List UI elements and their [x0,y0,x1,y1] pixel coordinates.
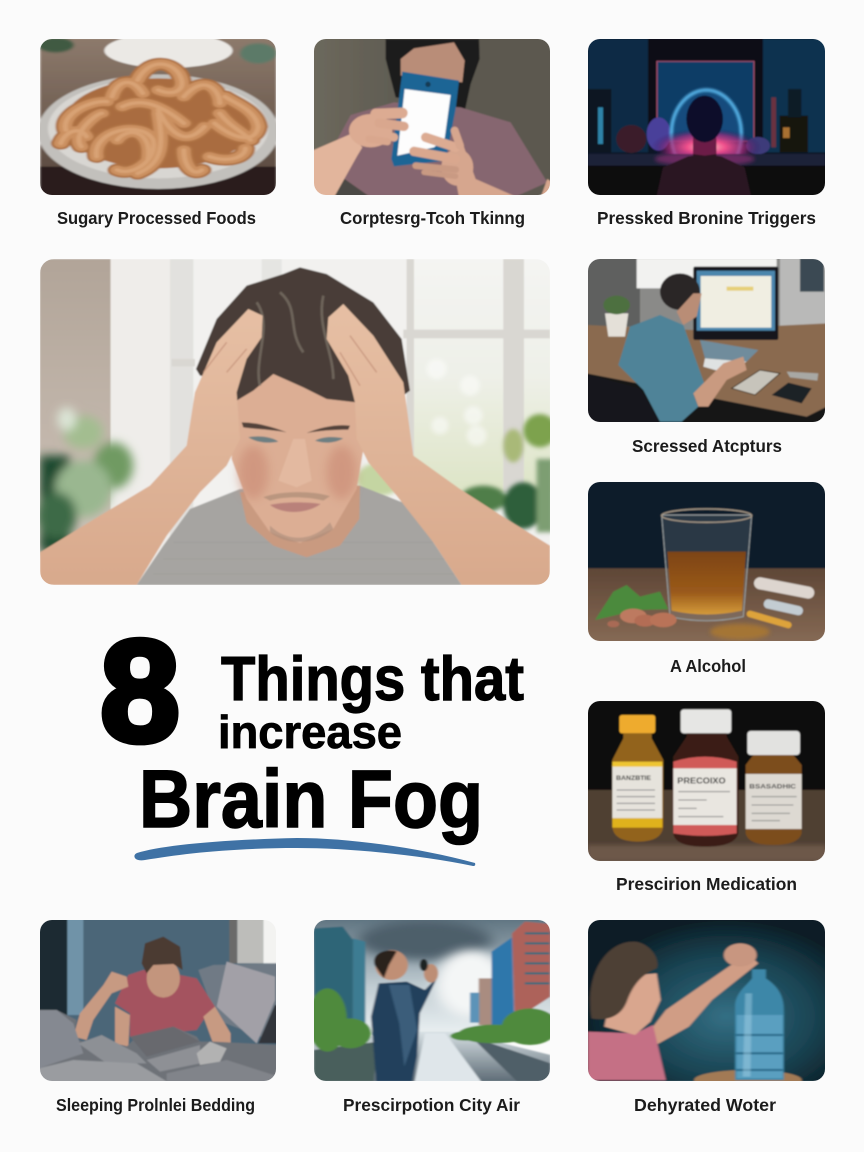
bottle left: BANZBTIE [616,775,651,782]
bottle centre [673,709,738,847]
panel: sugary processed foods photo [38,33,279,197]
panel: sleeping problems bedroom photo [38,918,278,1083]
title line: Things that: Things that [221,645,524,714]
bottle centre: PRECOIXO [677,775,726,785]
plate [38,74,279,189]
keyboard [700,340,758,362]
right hand and arm [327,304,550,585]
pillows [198,962,278,1043]
panel: city air photo [308,918,558,1082]
phone [391,72,459,166]
items on desk [732,370,818,403]
plant right [460,414,557,532]
blue swoosh underline [134,838,475,866]
hands [349,113,473,186]
panel: main photo of man holding head [37,259,557,585]
title: 8 Things that increase Brain Fog [100,610,524,866]
label: desk caption: Scressed Atcpturs [632,436,782,456]
buildings right [470,922,550,1028]
label: city air caption: Prescirpotion City Air [343,1095,520,1115]
shirt [137,486,462,585]
panel: bright screen triggers photo [586,37,828,197]
chair [587,374,660,423]
road [314,1032,550,1082]
panel: phone photo [312,37,552,197]
water bottle [735,969,784,1080]
glowing door [657,61,754,141]
blanket [38,1010,278,1083]
label: triggers caption: Pressked Bronine Triggers [597,208,816,228]
plant left [37,407,133,552]
panel: dehydrated water photo [586,918,827,1090]
left hand and arm [40,309,263,585]
label: sugary processed foods: Sugary Processed Foods [57,208,256,228]
bottle right: BSASADHIC [749,783,796,790]
panel: desk worker photo [587,257,827,423]
leaves and nuts [595,585,677,627]
trees [308,988,558,1052]
hair [196,267,410,402]
label: sleep caption: Sleeping Prolnlei Bedding [56,1095,255,1115]
silhouette [656,96,751,197]
label: water caption: Dehyrated Woter [634,1095,776,1115]
neck [240,486,360,557]
tubes [750,583,808,625]
title line: Brain Fog: Brain Fog [139,754,483,845]
table [694,1070,802,1090]
label: medication caption: Prescirion Medication [616,874,797,894]
window [637,258,777,288]
bottle left [612,715,663,842]
plant [603,296,630,337]
shelf objects [588,89,808,154]
facial features [242,422,350,542]
label: alcohol caption: A Alcohol [670,656,746,676]
face [232,359,364,543]
glow arch [654,86,757,155]
glass [662,509,752,621]
man [618,273,747,422]
woman [588,942,758,1080]
man [73,937,231,1047]
food pile [61,64,258,173]
bokeh [427,359,487,446]
label: phone caption: Corptesrg-Tcoh Tkinng [340,208,525,228]
buildings left [314,927,365,1025]
person [312,39,552,197]
bottle right [746,731,802,845]
panel: prescription medication photo [587,700,827,862]
panel: alcohol glass photo [587,480,827,643]
monitor [693,267,778,340]
man [371,950,438,1082]
title numeral: 8 [100,610,180,772]
title line: increase: increase [218,706,402,758]
desk [587,323,827,417]
window frame [172,259,550,492]
